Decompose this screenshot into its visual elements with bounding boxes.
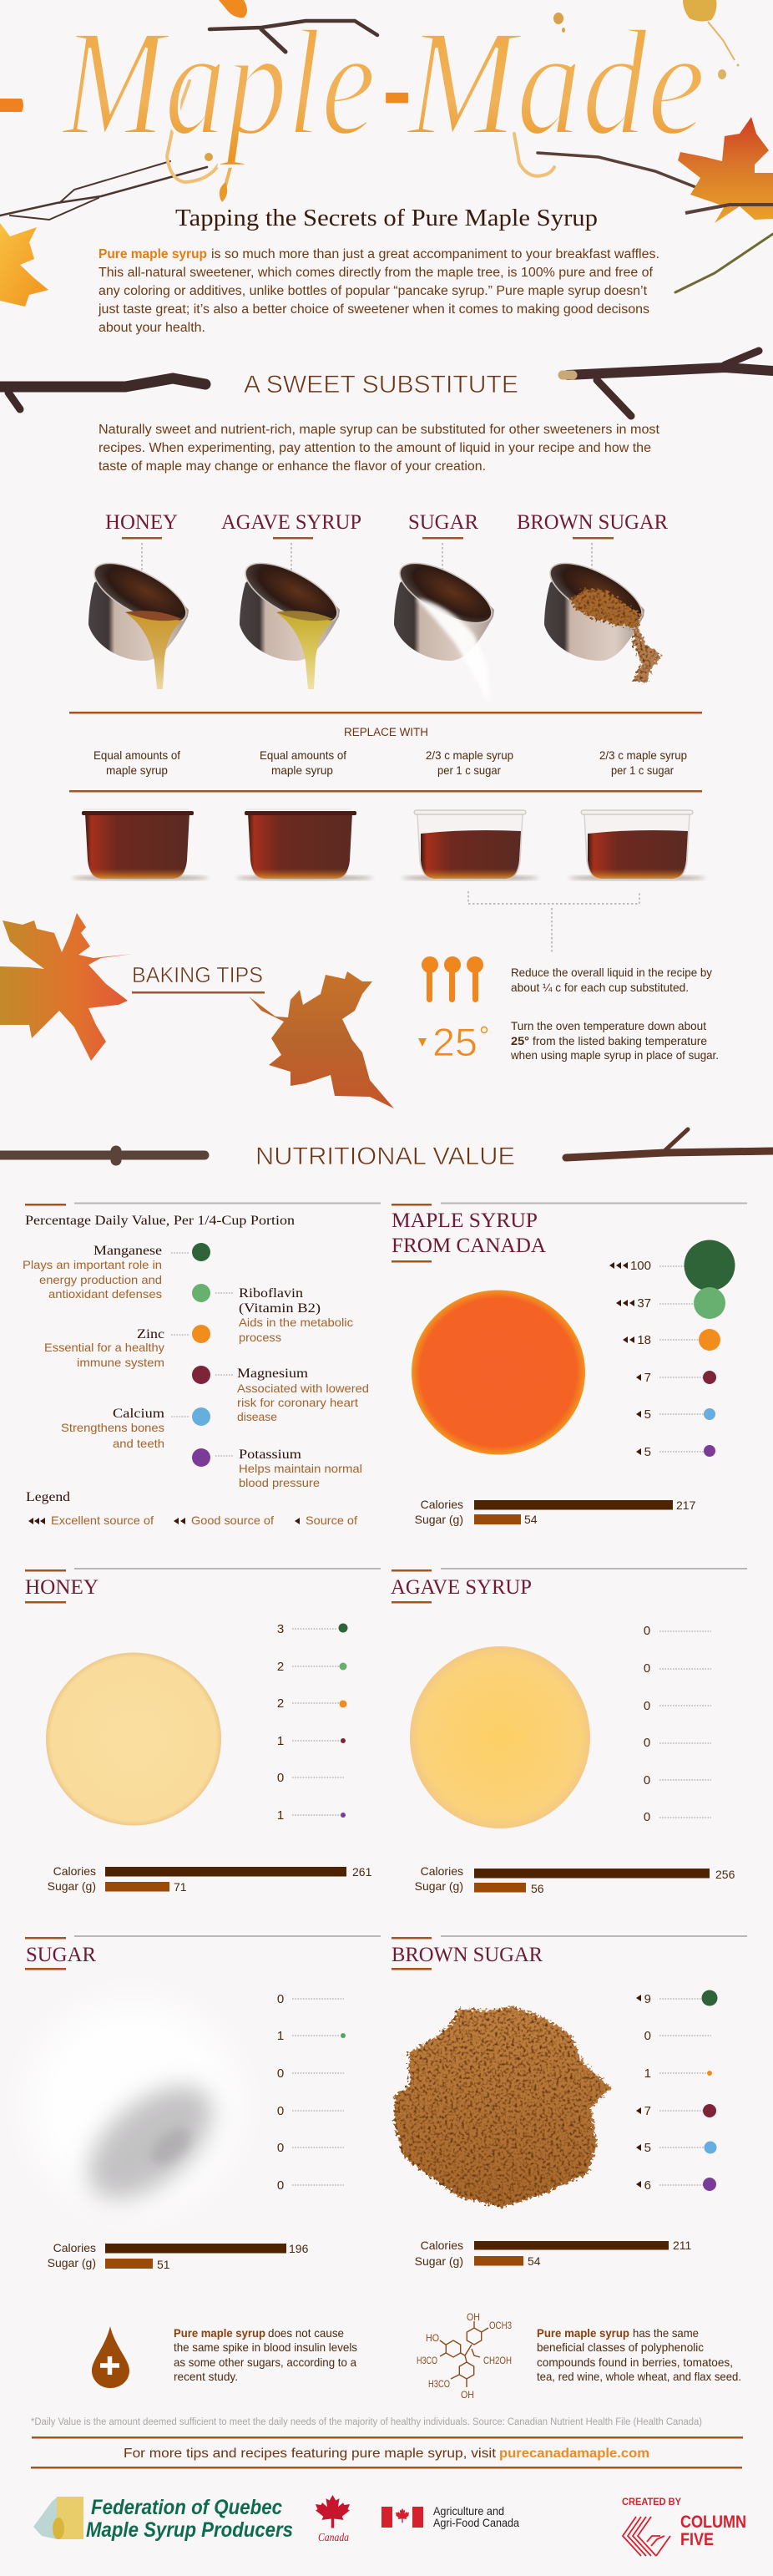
panel: honey: HONEY [25,1576,99,1599]
magnesium text: Magnesium [237,1367,309,1381]
nutrient values: 0 [644,1661,650,1676]
nutrient values: 2 [277,1660,284,1674]
icon: syrup drop with plus [92,2326,129,2388]
footnote: *Daily Value is the amount deemed sufficient to meet the daily needs of the majority of healthy individuals. Source: Canadian Nutrient Health File (Health Canada) [31,2417,702,2427]
intro paragraph: any coloring or additives, unlike bottles of popular “pancake syrup.” Pure maple syrup doesn’t [99,284,648,298]
jar: full 1 [82,809,194,879]
twig right of nutritional value [566,1129,773,1158]
nutrient values: 7 [644,2104,651,2118]
icon: 25 degrees down: 25 [432,1020,477,1064]
calories and sugar bars: 56 [531,1882,544,1895]
zinc text: Zinc [137,1327,164,1341]
nutrient values: 0 [277,1771,284,1785]
intro paragraph: about your health. [99,321,205,335]
logo: federation of quebec maple syrup producers: Maple Syrup Producers [86,2518,293,2542]
nutrient values [609,1240,735,1459]
replace-with table: REPLACE WITH [344,726,428,738]
replace-with table: Equal amounts of [93,748,180,762]
calories and sugar bars: Sugar (g) [48,2256,96,2269]
nutrient values: 0 [644,1699,650,1713]
replace-with table: 2/3 c maple syrup [426,748,513,762]
jar shadows [72,875,705,880]
replace-with table: maple syrup [271,763,333,777]
twig right of sweet substitute [563,351,773,416]
magnesium text: Associated with lowered [237,1382,369,1395]
potassium text [239,1448,362,1489]
title: Made [405,0,705,167]
nutrient values: 5 [644,2141,651,2155]
potassium text: blood pressure [239,1476,320,1489]
nutrient values: 0 [644,2029,651,2043]
panel: maple syrup from canada: FROM CANADA [392,1235,546,1257]
polyphenol text: Pure maple syrup [537,2326,629,2340]
sweetener labels: AGAVE SYRUP [221,511,361,534]
nutrient values: 37 [637,1296,651,1311]
call to action: purecanadamaple.com [499,2447,649,2461]
heading: nutritional value: NUTRITIONAL VALUE [255,1143,515,1170]
nutrient values: 18 [637,1333,651,1347]
calories and sugar bars: 211 [673,2239,692,2252]
logo: agriculture and agri-food canada: Agri-Food Canada [433,2516,519,2529]
nutrient values: 1 [277,1734,284,1748]
logo: column five: CREATED BY [622,2497,681,2508]
agave pool [410,1646,590,1828]
calcium text: Strengthens bones [61,1421,164,1434]
zinc text: Essential for a healthy [44,1341,164,1354]
panel: daily value key [23,1203,381,1527]
calories and sugar bars: Sugar (g) [415,1513,463,1526]
panel: daily value key: Percentage Daily Value, Per 1/4-Cup Portion [25,1214,295,1228]
polyphenol text: beneficial classes of polyphenolic [537,2340,704,2354]
jar: partial 2 [581,810,693,879]
calories and sugar bars: Calories [53,2241,96,2254]
tip text: oven: Turn the oven temperature down about [511,1019,706,1032]
icon: polyphenol molecule [417,2311,512,2401]
substitute paragraph: Naturally sweet and nutrient-rich, maple syrup can be substituted for other sweeteners in most [99,423,660,437]
nutrient values: 0 [644,1810,650,1824]
potassium text: Potassium [239,1448,302,1462]
intro paragraph [98,247,659,335]
logo: column five: COLUMN [680,2513,746,2532]
icon: three spoons [422,956,483,1002]
icon: polyphenol molecule: OH [467,2311,480,2323]
magnesium text: disease [237,1410,277,1423]
polyphenol text: tea, red wine, whole wheat, and flax seed. [537,2370,741,2383]
nutrient values: 0 [277,2141,284,2155]
calories and sugar bars: Sugar (g) [415,1879,463,1893]
logo: column five: FIVE [680,2530,714,2549]
nutrient values: 1 [277,1808,284,1823]
icon: maple leaf baking right [249,971,394,1108]
zinc text [44,1327,164,1369]
riboflavin text [239,1286,353,1344]
riboflavin text: (Vitamin B2) [239,1301,321,1316]
dotted bracket [468,891,639,952]
title [61,0,705,202]
nutrient values: 0 [277,2104,284,2118]
sweetener labels: SUGAR [408,511,478,534]
calcium text [61,1407,165,1450]
logo: federation of quebec maple syrup producers: Federation of Quebec [91,2496,282,2519]
logo: canada [316,2495,350,2544]
potassium text: Helps maintain normal [239,1462,362,1475]
twigs around title [0,21,773,292]
manganese text: antioxidant defenses [48,1287,162,1301]
tip text: oven: when using maple syrup in place of sugar. [510,1048,719,1062]
sweetener labels: HONEY [105,511,178,534]
calories and sugar bars: Calories [53,1864,96,1878]
sugar pile [29,2000,238,2220]
brown sugar pile [394,2006,611,2208]
substitute paragraph: taste of maple may change or enhance the flavor of your creation. [99,459,486,474]
polyphenol text: compounds found in berries, tomatoes, [537,2355,733,2369]
nutrient values: 1 [644,2066,651,2081]
logo: agriculture and agri-food canada [381,2504,519,2529]
calories and sugar bars: 54 [524,1513,538,1526]
nutrient values [636,1990,718,2193]
icon: maple leaf baking left [0,913,133,1061]
nutrient values: 6 [644,2178,651,2193]
nutrient values: 5 [644,1407,651,1422]
icon: cup pouring brown sugar [542,551,662,683]
replace-with table: per 1 c sugar [611,763,674,777]
legend: Excellent source of [51,1514,154,1527]
heading: a sweet substitute: A SWEET SUBSTITUTE [244,371,518,398]
panel: brown sugar [392,1935,747,2268]
zinc text: immune system [77,1356,164,1369]
polyphenol text: has the same [633,2326,699,2340]
riboflavin text: Aids in the metabolic [239,1316,353,1329]
insulin text: as some other sugars, according to a [174,2355,356,2369]
manganese text: Manganese [93,1244,162,1258]
insulin text: the same spike in blood insulin levels [174,2340,357,2354]
logo: column five [622,2497,746,2556]
legend: Source of [306,1514,357,1527]
manganese text: energy production and [39,1273,162,1286]
logo: canada: Canada [318,2532,349,2544]
legend: Legend [26,1490,70,1504]
panel: sugar [25,1935,381,2271]
nutrient values: 3 [277,1622,284,1636]
nutrient values: 2 [277,1696,284,1711]
substitute paragraph: recipes. When experimenting, pay attention to the amount of liquid in your recipe and how the [99,441,651,455]
manganese text [23,1244,162,1301]
calories and sugar bars: 71 [174,1880,187,1894]
honey pool [46,1652,221,1826]
sweetener labels: BROWN SUGAR [517,511,668,534]
nutrient values [277,1622,347,1823]
replace-with table [69,712,702,792]
calcium text: and teeth [113,1437,164,1450]
nutrient values: 0 [644,1773,650,1787]
title: - [382,0,412,167]
sweetener labels [105,511,668,573]
nutrient values: 9 [644,1992,651,2006]
replace-with table: maple syrup [106,763,168,777]
calories and sugar bars: Sugar (g) [415,2254,463,2268]
tip text: liquid [511,966,712,994]
icon: polyphenol molecule: HO [426,2332,439,2344]
calories and sugar bars [415,1864,735,1895]
tip text: oven: from the listed baking temperature [533,1034,707,1047]
jar: partial 1 [414,810,526,879]
nutrient values: 0 [277,1992,284,2006]
icon: polyphenol molecule: H3CO [417,2355,437,2366]
insulin text: does not cause [268,2326,344,2340]
nutrient values: 0 [277,2066,284,2081]
insulin text: recent study. [174,2370,238,2383]
icon: cup pouring agave [237,551,346,689]
nutrient values [644,1624,711,1824]
panel: agave syrup [391,1568,747,1895]
calories and sugar bars: Calories [421,1864,463,1878]
nutrient values: 0 [277,2178,284,2193]
calcium text: Calcium [113,1407,165,1421]
nutrient values: 0 [644,1736,650,1750]
riboflavin text: Riboflavin [239,1286,303,1301]
replace-with table: 2/3 c maple syrup [599,748,687,762]
manganese text: Plays an important role in [23,1258,162,1271]
calories and sugar bars [415,1498,696,1526]
panel: sugar: SUGAR [26,1944,96,1966]
icon: cup pouring honey [86,551,195,689]
calories and sugar bars: 196 [289,2242,309,2255]
icon: cup pouring sugar [392,551,500,704]
calories and sugar bars: 54 [528,2254,541,2268]
nutrient dots [171,1243,233,1467]
calories and sugar bars: 51 [157,2258,170,2271]
panel: agave syrup: AGAVE SYRUP [391,1576,532,1599]
panel: honey [25,1568,381,1894]
calories and sugar bars [415,2239,692,2268]
heading: baking tips: BAKING TIPS [132,962,263,987]
nutrient values: 1 [277,2029,284,2043]
insulin text: Pure maple syrup [174,2326,265,2340]
calories and sugar bars: Calories [421,1498,463,1511]
icon: 25 degrees down [418,1020,488,1064]
calories and sugar bars [48,1864,372,1894]
maple syrup pool [412,1290,585,1455]
insulin text [174,2326,357,2383]
nutrient values: 7 [644,1371,651,1385]
replace-with table: per 1 c sugar [437,763,501,777]
call to action [31,2437,743,2469]
calories and sugar bars: Calories [421,2239,463,2252]
calories and sugar bars [48,2241,309,2271]
substitute paragraph [99,423,660,474]
tip text: oven: 25° [511,1034,529,1047]
twig left of sweet substitute [0,378,205,409]
panel: maple syrup from canada: MAPLE SYRUP [392,1209,538,1232]
intro paragraph: This all-natural sweetener, which comes directly from the maple tree, is 100% pure and free of [99,266,654,280]
polyphenol text [537,2326,741,2383]
twig left of nutritional value [0,1151,205,1160]
nutrient values: 100 [630,1259,651,1273]
riboflavin text: process [239,1331,281,1344]
icon: polyphenol molecule: OCH3 [489,2320,512,2331]
logo: agriculture and agri-food canada: Agriculture and [433,2504,504,2518]
subtitle: Tapping the Secrets of Pure Maple Syrup [175,205,598,231]
calories and sugar bars: 261 [352,1865,372,1879]
calories and sugar bars: Sugar (g) [48,1879,96,1893]
intro paragraph: is so much more than just a great accompaniment to your breakfast waffles. [211,247,659,261]
panel: maple syrup from canada [392,1203,747,1526]
icon: maple leaf left [0,223,48,307]
magnesium text: risk for coronary heart [237,1396,358,1409]
tip text: liquid: about ¼ c for each cup substituted. [511,981,689,994]
nutrient values: 0 [644,1624,650,1638]
decorative syrup drops [0,0,740,161]
magnesium text [237,1367,369,1423]
panel: brown sugar: BROWN SUGAR [392,1944,543,1966]
tip text: oven [510,1019,719,1062]
tip text: liquid: Reduce the overall liquid in the recipe by [511,966,712,979]
legend: Good source of [191,1514,274,1527]
icon: polyphenol molecule: H3CO [428,2378,450,2390]
logo: federation of quebec maple syrup producers [33,2496,293,2542]
icon: maple leaf top right [678,117,773,223]
twig over leaf [685,205,773,213]
title: Maple [61,0,376,167]
nutrient values: 5 [644,1445,651,1459]
legend [26,1490,357,1527]
intro paragraph: Pure maple syrup [99,247,207,261]
nutrient values [277,1992,346,2193]
calories and sugar bars: 256 [715,1868,735,1881]
jar: full 2 [245,809,356,879]
call to action: For more tips and recipes featuring pure maple syrup, visit [124,2447,497,2461]
intro paragraph: just taste great; it’s also a better choice of sweetener when it comes to making good decisons [98,302,649,317]
icon: polyphenol molecule: CH2OH [483,2355,512,2366]
icon: polyphenol molecule: OH [461,2389,474,2401]
replace-with table: Equal amounts of [260,748,346,762]
calories and sugar bars: 217 [676,1498,696,1512]
